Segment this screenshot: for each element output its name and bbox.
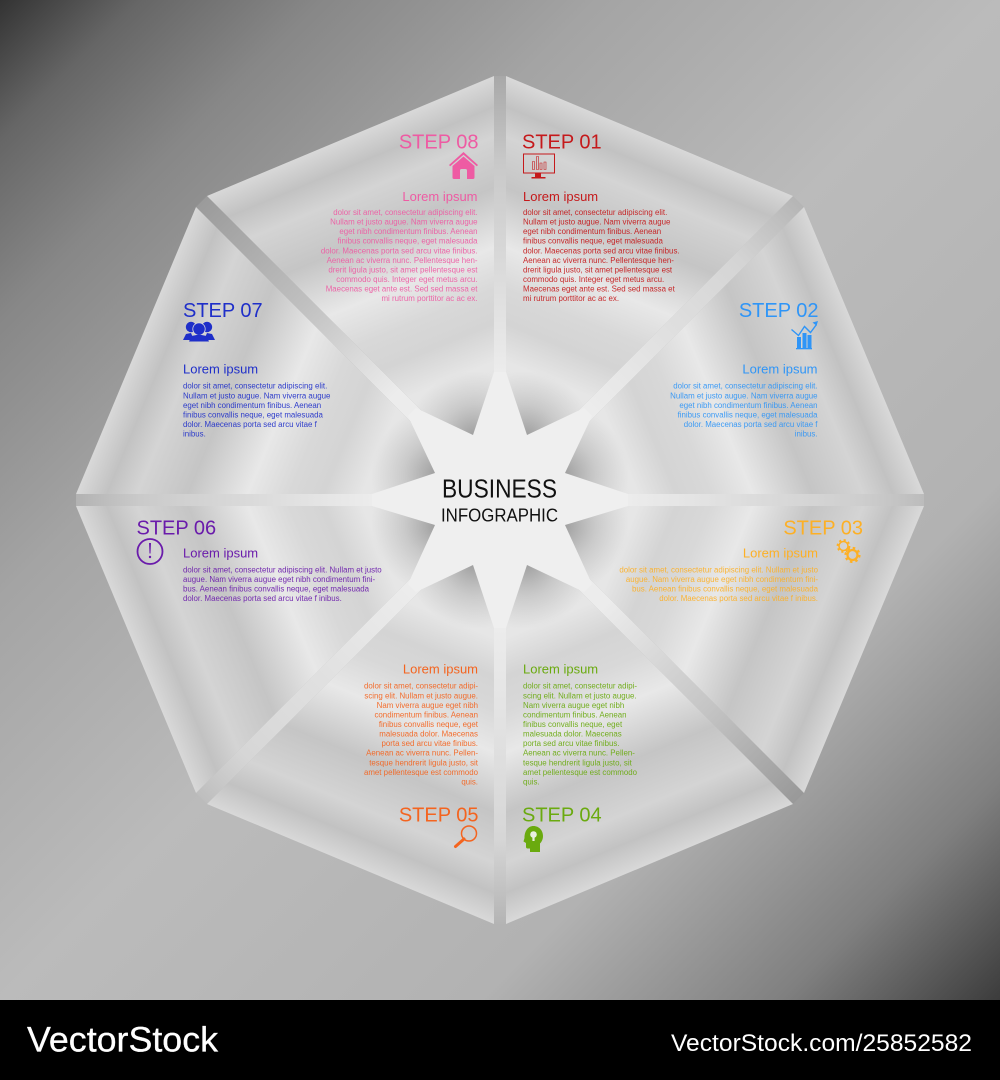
octagon separator gaps <box>76 76 924 924</box>
step 07 <box>183 300 331 439</box>
step 05: Lorem ipsum <box>403 661 478 676</box>
step 04: Lorem ipsum <box>523 661 598 676</box>
step 08: dolor sit amet, consectetur adipiscing elit. <box>333 208 478 217</box>
step 08: drerit ligula justo, sit amet pellentesque est <box>328 265 478 274</box>
step 01: STEP 01 <box>522 132 602 154</box>
step 04: finibus convallis neque, eget <box>523 720 623 729</box>
step 07: finibus convallis neque, eget malesuada <box>183 410 324 419</box>
step 03: STEP 03 <box>783 517 863 539</box>
step 04: tesque hendrerit ligula justo, sit <box>523 758 633 767</box>
step 02 <box>670 300 818 439</box>
step 05: tesque hendrerit ligula justo, sit <box>369 758 479 767</box>
footer bar <box>0 1000 1000 1080</box>
step 05: Aenean ac viverra nunc. Pellen- <box>366 749 478 758</box>
step 06: bus. Aenean finibus convallis neque, eget malesuada <box>183 584 370 593</box>
step 08: Aenean ac viverra nunc. Pellentesque hen- <box>327 256 478 265</box>
step 07: eget nibh condimentum finibus. Aenean <box>183 401 321 410</box>
icon: monitor chart <box>524 154 554 178</box>
icon: head with light bulb <box>524 826 543 852</box>
step 08: Lorem ipsum <box>402 189 478 204</box>
step 07: dolor sit amet, consectetur adipiscing elit. <box>183 382 327 391</box>
step 07: inibus. <box>183 430 206 439</box>
step 02: inibus. <box>795 430 818 439</box>
step 08: commodo quis. Integer eget metus arcu. <box>336 275 478 284</box>
footer logo text: VectorStock <box>27 1020 218 1060</box>
step 06: STEP 06 <box>136 517 216 539</box>
step 05: porta sed arcu vitae finibus. <box>382 739 478 748</box>
step 05: condimentum finibus. Aenean <box>374 710 478 719</box>
icon: growth chart <box>792 321 818 349</box>
step 01: Aenean ac viverra nunc. Pellentesque hen- <box>523 256 674 265</box>
octagon segments <box>76 76 924 924</box>
center title: INFOGRAPHIC <box>441 506 558 526</box>
step 08: Maecenas eget ante est. Sed sed massa et <box>326 285 478 294</box>
step 03 <box>619 517 863 603</box>
step 05 <box>364 661 479 846</box>
step 06: dolor sit amet, consectetur adipiscing elit. Nullam et justo <box>183 565 382 574</box>
step 07: STEP 07 <box>183 300 263 322</box>
step 04: malesuada dolor. Maecenas <box>523 730 622 739</box>
step 01: dolor sit amet, consectetur adipiscing elit. <box>523 208 667 217</box>
step 01: drerit ligula justo, sit amet pellentesque est <box>523 265 673 274</box>
step 01: eget nibh condimentum finibus. Aenean <box>523 227 661 236</box>
step 02: Lorem ipsum <box>742 361 818 376</box>
step 08: Nullam et justo augue. Nam viverra augue <box>330 218 478 227</box>
step 07: dolor. Maecenas porta sed arcu vitae f <box>183 420 318 429</box>
step 05: malesuada dolor. Maecenas <box>379 730 478 739</box>
step 04: dolor sit amet, consectetur adipi- <box>523 682 637 691</box>
step 08: STEP 08 <box>399 132 478 154</box>
icon: group of people <box>183 322 215 342</box>
step 04: quis. <box>523 777 540 786</box>
step 01 <box>522 132 680 303</box>
step 05: Nam viverra augue eget nibh <box>377 701 478 710</box>
step 03: Lorem ipsum <box>743 545 818 560</box>
step 06: Lorem ipsum <box>183 545 258 560</box>
step 05: amet pellentesque est commodo <box>364 768 479 777</box>
step 04: Nam viverra augue eget nibh <box>523 701 624 710</box>
step 04 <box>522 661 638 852</box>
step 01: dolor. Maecenas porta sed arcu vitae finibus. <box>523 246 680 255</box>
step 05: scing elit. Nullam et justo augue. <box>364 691 478 700</box>
step 07: Lorem ipsum <box>183 361 258 376</box>
step 04: condimentum finibus. Aenean <box>523 710 627 719</box>
center title: BUSINESS <box>442 473 557 503</box>
step 02: finibus convallis neque, eget malesuada <box>678 410 818 419</box>
step 02: STEP 02 <box>739 300 818 322</box>
icon: exclamation circle <box>138 539 162 564</box>
step 03: dolor. Maecenas porta sed arcu vitae f inibus. <box>659 594 818 603</box>
icon: magnifier <box>456 826 476 846</box>
step 04: scing elit. Nullam et justo augue. <box>523 691 637 700</box>
step 05: quis. <box>461 777 478 786</box>
step 04: STEP 04 <box>522 805 602 827</box>
step 08: dolor. Maecenas porta sed arcu vitae finibus. <box>321 246 478 255</box>
step 04: Aenean ac viverra nunc. Pellen- <box>523 749 635 758</box>
step 08: mi rutrum porttitor ac ac ex. <box>381 294 478 303</box>
icon: gears <box>838 540 860 562</box>
step 03: bus. Aenean finibus convallis neque, eget malesuada <box>632 584 819 593</box>
central eight-point star <box>372 372 628 628</box>
step 01: Maecenas eget ante est. Sed sed massa et <box>523 285 676 294</box>
step 01: commodo quis. Integer eget metus arcu. <box>523 275 664 284</box>
step 01: Nullam et justo augue. Nam viverra augue <box>523 218 671 227</box>
step 02: dolor sit amet, consectetur adipiscing elit. <box>673 382 818 391</box>
step 05: STEP 05 <box>399 805 478 827</box>
step 03: dolor sit amet, consectetur adipiscing elit. Nullam et justo <box>619 565 818 574</box>
step 02: eget nibh condimentum finibus. Aenean <box>679 401 818 410</box>
step 07: Nullam et justo augue. Nam viverra augue <box>183 391 331 400</box>
step 01: mi rutrum porttitor ac ac ex. <box>523 294 619 303</box>
step 08: finibus convallis neque, eget malesuada <box>338 237 478 246</box>
icon: house <box>449 152 478 179</box>
step 08: eget nibh condimentum finibus. Aenean <box>339 227 478 236</box>
step 02: dolor. Maecenas porta sed arcu vitae f <box>684 420 818 429</box>
step 03: augue. Nam viverra augue eget nibh condimentum fini- <box>626 575 818 584</box>
step 06: augue. Nam viverra augue eget nibh condimentum fini- <box>183 575 375 584</box>
step 05: finibus convallis neque, eget <box>379 720 479 729</box>
step 01: Lorem ipsum <box>523 189 598 204</box>
step 04: amet pellentesque est commodo <box>523 768 638 777</box>
step 06 <box>136 517 382 603</box>
step 08 <box>321 132 478 303</box>
step 01: finibus convallis neque, eget malesuada <box>523 237 664 246</box>
step 06: dolor. Maecenas porta sed arcu vitae f inibus. <box>183 594 342 603</box>
step 05: dolor sit amet, consectetur adipi- <box>364 682 478 691</box>
step 02: Nullam et justo augue. Nam viverra augue <box>670 391 818 400</box>
step 04: porta sed arcu vitae finibus. <box>523 739 620 748</box>
center title <box>441 473 558 526</box>
footer image id: VectorStock.com/25852582 <box>671 1030 972 1057</box>
